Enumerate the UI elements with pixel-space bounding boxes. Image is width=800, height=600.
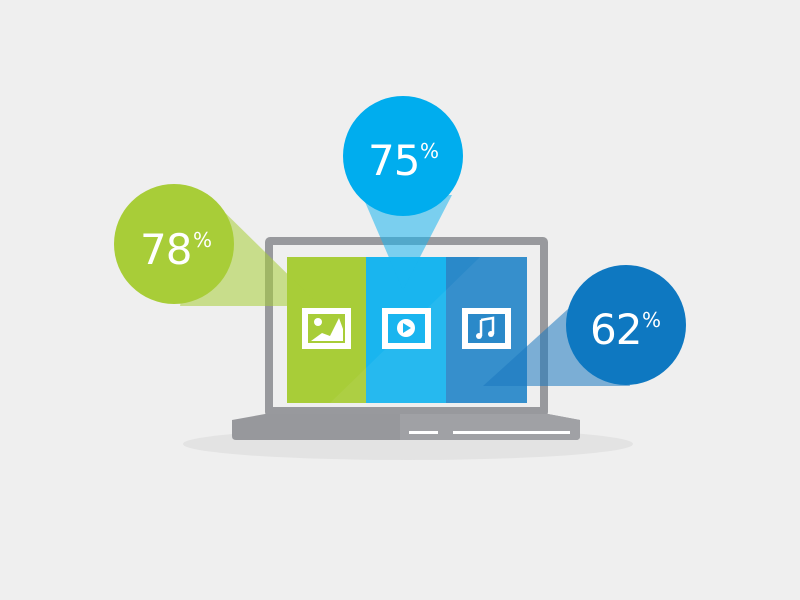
callout: 78%: % [193, 228, 212, 252]
screen column: green [287, 257, 367, 403]
callout: 62%: % [642, 308, 661, 332]
beam: cyan [362, 195, 452, 290]
icon: music [462, 308, 511, 349]
laptop [232, 237, 580, 440]
callout: 78%: 78 [140, 225, 191, 274]
beam: dark blue [483, 280, 630, 386]
callout: 75%: 75 [368, 136, 419, 185]
screen column: cyan [366, 257, 447, 403]
screen bezel [265, 237, 548, 417]
callout: 62% [566, 265, 686, 385]
beam: green [180, 193, 320, 306]
icon: video [382, 308, 431, 349]
callout: 62%: 62 [590, 305, 641, 354]
laptop shadow [183, 428, 633, 460]
icon: image [302, 308, 351, 349]
laptop base [232, 414, 580, 440]
callout: 78% [114, 184, 234, 304]
callout: 75% [343, 96, 463, 216]
screen column: blue [446, 257, 527, 403]
callout: 75%: % [420, 139, 439, 163]
